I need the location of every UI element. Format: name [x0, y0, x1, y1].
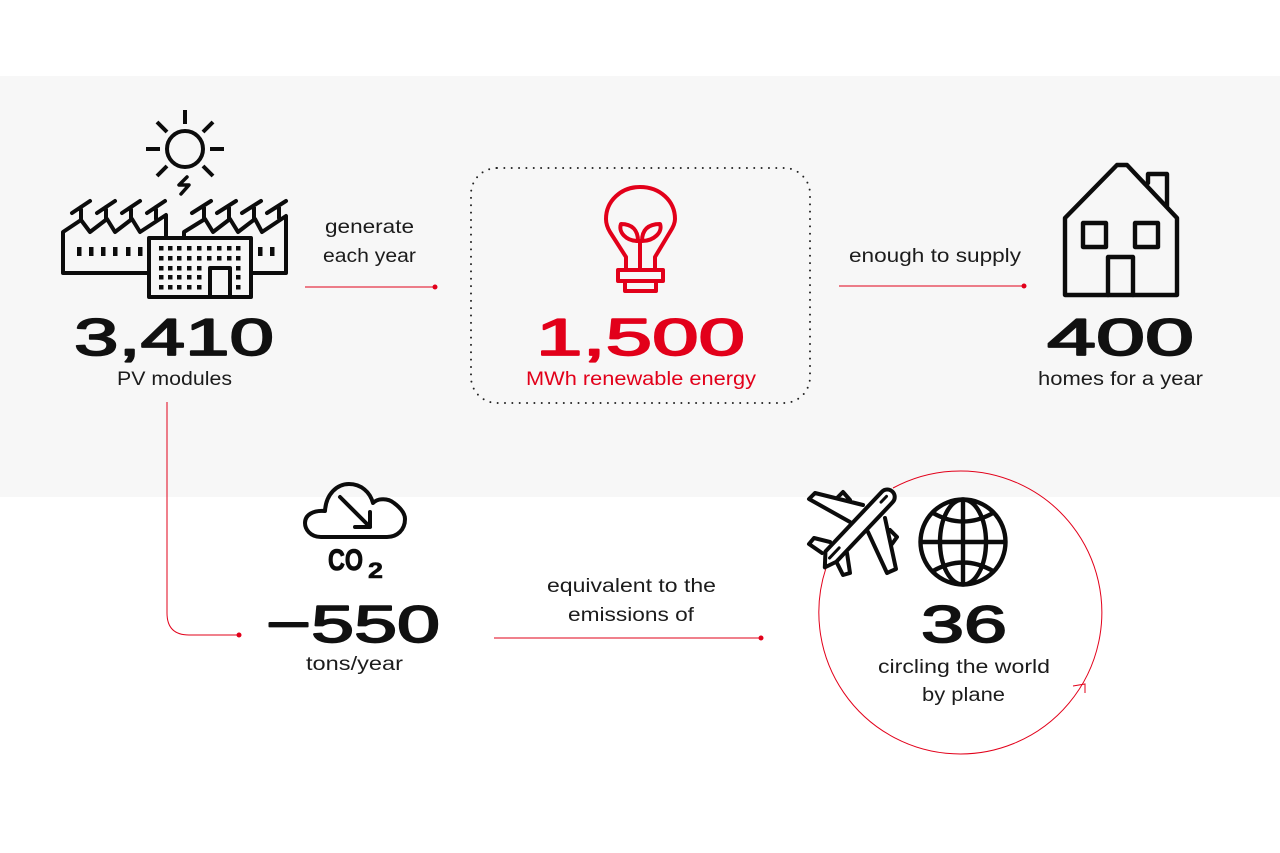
- label: tons/year: tons/year: [306, 654, 404, 675]
- circular arrow around the world: [819, 471, 1102, 754]
- label: generate each year: [323, 217, 417, 267]
- label: homes for a year: homes for a year: [1038, 369, 1204, 390]
- stat: 3,410: 3,410: [74, 309, 274, 367]
- label: equivalent to the emissions of: emissions of: [568, 605, 695, 626]
- label: generate each year: each year: [323, 246, 417, 267]
- label: PV modules: PV modules: [117, 369, 232, 390]
- label: generate each year: generate: [325, 217, 414, 238]
- icon: cloud with CO2: [305, 484, 405, 583]
- icon: house: [1065, 165, 1177, 295]
- icon: cloud with CO2: 2: [368, 558, 383, 583]
- label: MWh renewable energy: MWh renewable energy: [526, 369, 757, 390]
- label: circling the world by plane: by plane: [922, 685, 1005, 706]
- icon: sun: [146, 110, 224, 194]
- icon: airplane: [809, 486, 898, 575]
- grey background band: [0, 76, 1280, 497]
- icon: factory: [63, 201, 286, 297]
- stat: -550: −550: [266, 596, 440, 654]
- arrow: tons to flights: [494, 636, 764, 640]
- label: circling the world by plane: circling the world: [878, 657, 1050, 678]
- label: circling the world by plane: [878, 657, 1050, 706]
- stat: 36: 36: [921, 596, 1007, 654]
- stat: 400: 400: [1047, 309, 1194, 367]
- connector: modules to tons per year: [167, 402, 242, 638]
- label: equivalent to the emissions of: [547, 576, 716, 626]
- icon: globe: [920, 500, 1006, 584]
- stat: 1,500: 1,500: [536, 309, 745, 367]
- label: enough to supply: enough to supply: [849, 246, 1022, 267]
- icon: cloud with CO2: CO: [328, 544, 363, 577]
- panel: renewable energy dotted box: [471, 168, 810, 403]
- icon: light bulb with leaves: [606, 187, 675, 291]
- label: equivalent to the emissions of: equivalent to the: [547, 576, 716, 597]
- arrow: energy to homes: [839, 284, 1026, 288]
- arrow: modules to energy: [305, 284, 438, 290]
